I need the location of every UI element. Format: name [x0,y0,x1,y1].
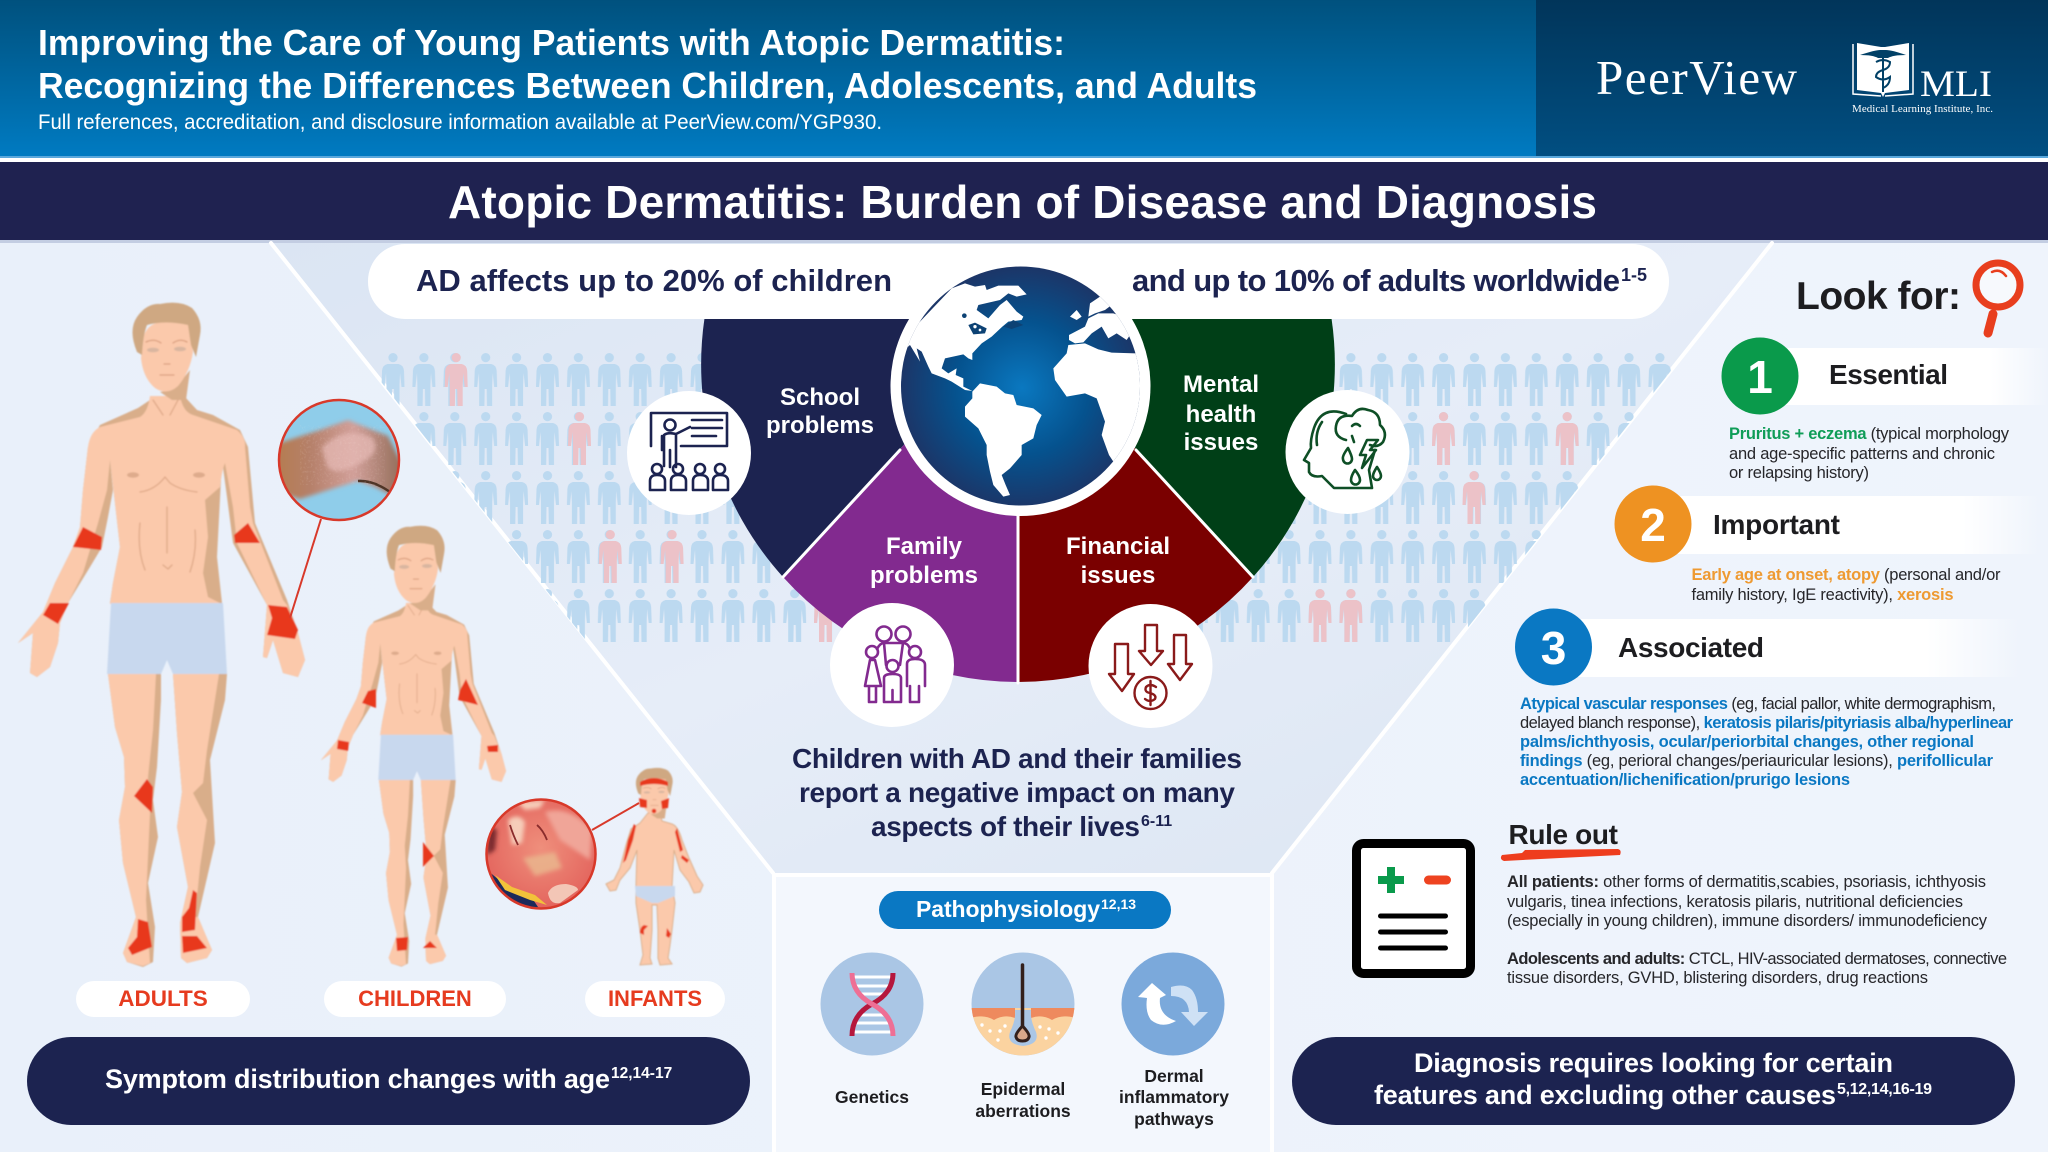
label: adults [76,981,250,1017]
center background wedge [271,243,1772,875]
rule out: All patients: other forms of dermatitis,scabies, psoriasis, ichthyosis [1507,873,1986,891]
segment: financial issues: Financial [1066,533,1170,560]
inset photo: infant skin [485,798,639,912]
adult figure [18,303,305,967]
criterion 3: associated: palms/ichthyosis, ocular/periorbital changes, other regional [1520,733,1974,751]
page background [0,240,2048,1152]
icon: family [830,603,954,727]
segment: financial issues [1018,320,1253,682]
impact statement: aspects of their lives [871,811,1140,842]
rule out: vulgaris, tinea infections, keratosis pilaris, nutritional deficiencies [1507,893,1963,911]
criterion 1: essential: Pruritus + eczema (typical morphology [1729,425,2010,443]
pathophysiology labels: inflammatory [1119,1087,1229,1107]
icon: financial [1088,604,1212,728]
Africa [1053,343,1140,462]
PeerView logo: PeerView [1596,50,1798,105]
impact statement [792,743,1242,842]
segment: mental health issues: health [1186,401,1256,428]
symptom distribution callout: 12,14-17 [611,1065,672,1082]
pathophysiology labels [835,1066,1229,1129]
impact statement: report a negative impact on many [799,777,1235,808]
panel: symptom distribution [18,303,750,1125]
segment: mental health issues: issues [1184,429,1258,456]
criterion 2: important: 2 [1640,499,1666,551]
North America [898,283,1027,391]
criterion 1: essential: or relapsing history) [1729,464,1869,482]
look for heading [1796,263,2020,333]
section title band [0,162,2048,243]
header banner [0,0,2048,162]
pathophysiology labels: pathways [1134,1109,1214,1129]
header title: Recognizing the Differences Between Children, Adolescents, and Adults [38,65,1257,106]
icon: school [627,391,751,515]
rule out: Adolescents and adults: CTCL, HIV-associated dermatoses, connective [1507,950,2007,968]
segment: family problems: Family [886,533,963,560]
impact statement: Children with AD and their families [792,743,1242,774]
people pictogram [378,350,1683,645]
diagnosis callout: 5,12,14,16-19 [1837,1081,1932,1098]
criterion 3: associated [1515,608,2020,789]
MLI logo: Medical Learning Institute, Inc. [1852,103,1993,115]
criterion 1: essential: 1 [1747,351,1773,403]
pathophysiology labels: Epidermal [981,1079,1065,1099]
diagnosis callout: features and excluding other causes [1374,1080,1836,1110]
criterion 2: important: Early age at onset, atopy (personal and/or [1692,566,2001,584]
icon: genetics [820,952,924,1056]
criterion 2: important: family history, IgE reactivity), xerosis [1692,586,1954,604]
segment: family problems: problems [870,562,978,589]
criterion 1: essential: Essential [1829,359,1948,390]
Europe [1069,313,1129,344]
impact statement: 6-11 [1141,813,1172,830]
rule out: Rule out [1508,819,1618,850]
panel: pathophysiology [774,875,1272,1152]
segment: school problems: School [780,384,860,411]
look for heading: Look for: [1796,275,1961,318]
segment: family problems [783,320,1018,682]
prevalence in adults: 1-5 [1621,265,1647,285]
segment: school problems: problems [766,412,874,439]
criterion 1: essential: and age-specific patterns and chronic [1729,445,1995,463]
criterion 3: associated: accentuation/lichenification/prurigo lesions [1520,771,1850,789]
label: infants: INFANTS [608,986,702,1011]
icon: mental health [1286,390,1410,514]
criterion 3: associated: delayed blanch response), keratosis pilaris/pityriasis alba/hyperlinear [1520,714,2014,732]
MLI logo [1852,43,1993,115]
icon: clipboard [1356,844,1470,974]
symptom distribution callout: Symptom distribution changes with age [105,1064,610,1094]
diagnosis callout: Diagnosis requires looking for certain [1414,1048,1893,1078]
criterion 3: associated: findings (eg, perioral changes/periauricular lesions), perifollicular [1520,752,1994,770]
pathophysiology heading: 12,13 [1101,896,1136,912]
infant figure [606,768,703,965]
label: children: CHILDREN [358,986,472,1011]
pathophysiology heading: Pathophysiology [916,896,1100,922]
rule out: (especially in young children), immune disorders/ immunodeficiency [1507,912,1988,930]
segment: financial issues: issues [1081,562,1155,589]
child figure [321,526,506,967]
South America [965,383,1042,497]
pathophysiology heading [879,891,1171,929]
section title: Atopic Dermatitis: Burden of Disease and Diagnosis [448,176,1597,228]
criterion 2: important [1614,486,2040,604]
rule out: tissue disorders, GVHD, blistering disorders, drug reactions [1507,969,1928,987]
criterion 2: important: Important [1713,509,1840,540]
pathophysiology labels: Dermal [1144,1066,1204,1086]
icon: epidermal [970,952,1080,1058]
segment: mental health issues: Mental [1183,371,1259,398]
criterion 3: associated: Atypical vascular responses (eg, facial pallor, white dermographism, [1520,695,1996,713]
segment: mental health issues [1018,319,1335,577]
impact pie chart [701,319,1335,683]
rule out [1501,819,2007,987]
MLI logo: MLI [1920,64,1992,105]
criterion 3: associated: Associated [1618,632,1764,663]
icon: magnifier [1976,263,2020,333]
label: children [324,981,506,1017]
header title [38,22,1257,106]
label: adults: ADULTS [118,986,208,1011]
pathophysiology labels: Genetics [835,1087,909,1107]
criterion 3: associated: 3 [1541,622,1566,674]
pathophysiology labels: aberrations [975,1101,1071,1121]
prevalence in adults: and up to 10% of adults worldwide [1132,263,1620,298]
icon: dermal pathways [1122,952,1224,1056]
criterion 1: essential [1722,338,2048,482]
header subtitle: Full references, accreditation, and disclosure information available at PeerView.com/YGP930. [38,111,882,134]
segment: school problems [701,319,1018,577]
header title: Improving the Care of Young Patients with Atopic Dermatitis: [38,22,1065,63]
globe [890,256,1155,516]
prevalence in children: AD affects up to 20% of children [416,263,892,298]
diagnosis callout [1292,1037,2015,1125]
symptom distribution callout [27,1037,750,1125]
label: infants [585,981,725,1017]
prevalence pill [368,244,1669,319]
inset photo: adult skin [278,398,400,618]
